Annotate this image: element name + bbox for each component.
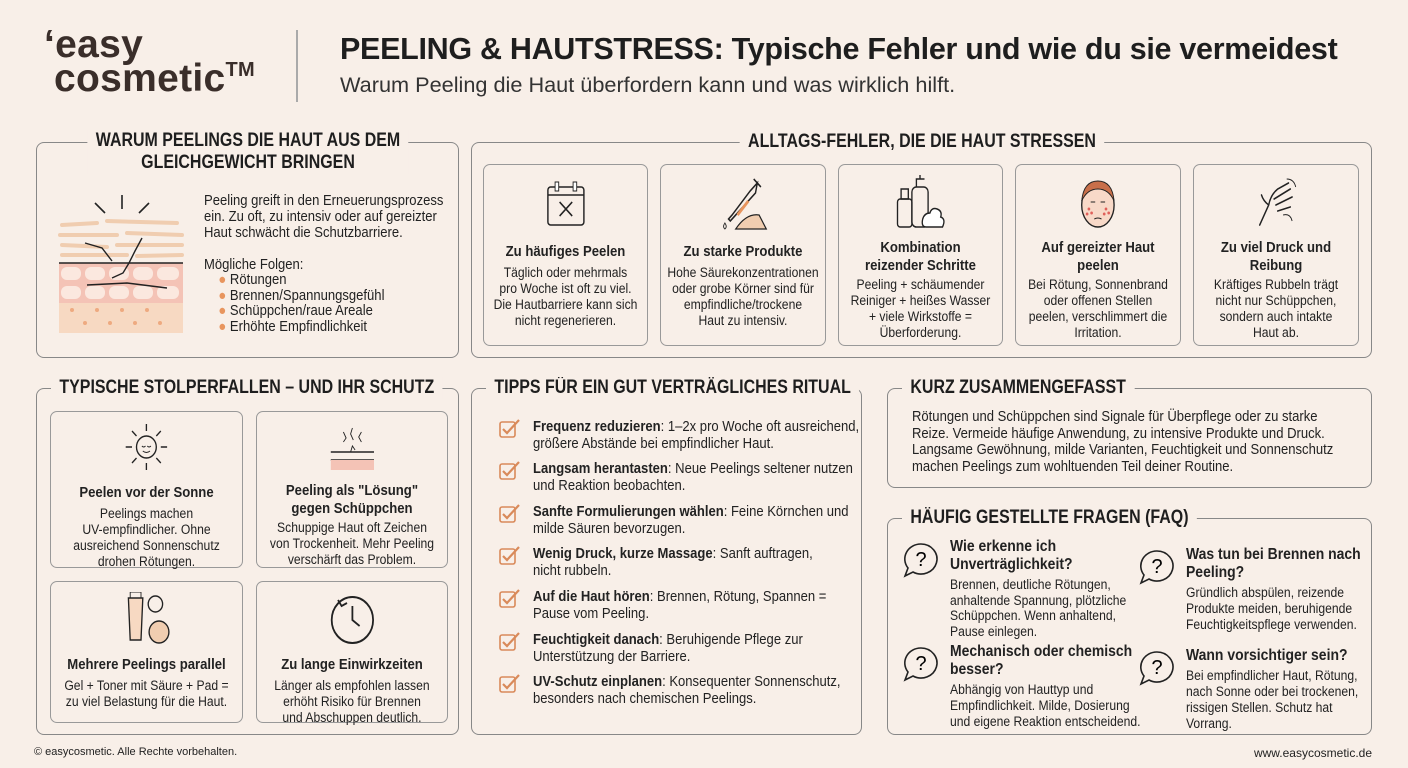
panel: pitfalls: [36, 388, 459, 735]
panel: FAQ: ?: [915, 549, 927, 571]
card: flakes: Peeling als "Lösung": [286, 483, 418, 499]
heading: GLEICHGEWICHT BRINGEN: [141, 152, 355, 173]
text block: ● Erhöhte Empfindlichkeit: [218, 318, 367, 334]
faq 1: anhaltende Spannung, plötzliche: [950, 592, 1126, 608]
card: strong products: Hohe Säurekonzentrationen: [667, 265, 819, 280]
title: PEELING & HAUTSTRESS: Typische Fehler und wie du sie vermeidest: [340, 32, 1337, 66]
panel: why peeling: [36, 142, 459, 358]
card: strong products: Haut zu intensiv.: [699, 313, 787, 328]
faq 3: Abhängig von Hauttyp und: [950, 682, 1093, 697]
summary text: Langsame Gewöhnung, milde Varianten, Feuchtigkeit und Sonnenschutz: [912, 442, 1333, 458]
tip 5: [533, 589, 826, 622]
tip 7: [533, 674, 841, 707]
card: sun: ausreichend Sonnenschutz: [73, 538, 220, 553]
card: sun: Peelen vor der Sonne: [79, 485, 214, 501]
card: sun: drohen Rötungen.: [98, 554, 195, 569]
tip 1: Frequenz reduzieren: 1–2x pro Woche oft ausreichend,: [533, 419, 859, 435]
card: irritated skin: [1015, 164, 1181, 346]
card: combination: Reiniger + heißes Wasser: [851, 293, 990, 308]
faq 1: Wie erkenne ich: [950, 538, 1056, 555]
card: flakes: Schuppige Haut oft Zeichen: [277, 520, 427, 535]
faq 2: Produkte meiden, beruhigende: [1186, 601, 1352, 616]
faq 3: besser?: [950, 661, 1004, 678]
tip 5: Pause vom Peeling.: [533, 606, 649, 622]
card: irritated skin: peelen, verschlimmert die: [1029, 309, 1167, 324]
heading: WARUM PEELINGS DIE HAUT AUS DEM: [96, 130, 400, 151]
card: sun: [50, 411, 243, 568]
faq 4: [1186, 647, 1358, 731]
card: too often: Die Hautbarriere kann sich: [494, 297, 637, 312]
faq 2: Feuchtigkeitspflege verwenden.: [1186, 617, 1357, 632]
faq 4: Vorrang.: [1186, 716, 1232, 731]
text block: ● Rötungen: [218, 272, 287, 288]
panel: FAQ: [887, 518, 1372, 735]
card: pressure: sondern auch intakte: [1220, 309, 1332, 324]
tip 7: besonders nach chemischen Peelings.: [533, 691, 756, 707]
tip 4: nicht rubbeln.: [533, 563, 611, 579]
tip 2: und Reaktion beobachten.: [533, 478, 685, 494]
tip 6: [533, 632, 803, 665]
card: too often: Täglich oder mehrmals: [504, 265, 627, 280]
subtitle: Warum Peeling die Haut überfordern kann und was wirklich hilft.: [340, 72, 955, 97]
card: irritated skin: peelen: [1077, 258, 1119, 274]
tip 3: milde Säuren bevorzugen.: [533, 521, 685, 537]
card: irritated skin: Auf gereizter Haut: [1041, 240, 1155, 256]
faq 3: Mechanisch oder chemisch: [950, 643, 1132, 660]
card: exposure time: und Abschuppen deutlich.: [282, 710, 422, 725]
heading: KURZ ZUSAMMENGEFASST: [910, 377, 1126, 398]
tip 3: [533, 504, 848, 537]
card: multiple peelings: Gel + Toner mit Säure + Pad =: [64, 678, 229, 693]
tip 5: Auf die Haut hören: Brennen, Rötung, Spannen =: [533, 589, 826, 605]
card: pressure: Kräftiges Rubbeln trägt: [1214, 277, 1338, 292]
text block: ein. Zu oft, zu intensiv oder auf gereizter: [204, 209, 437, 225]
tip 4: [533, 546, 813, 579]
summary text: [912, 408, 1333, 474]
summary text: Rötungen und Schüppchen sind Signale für Überpflege oder zu starke: [912, 409, 1318, 425]
text block: ● Brennen/Spannungsgefühl: [218, 288, 384, 304]
faq 2: [1186, 546, 1361, 632]
card: sun: UV-empfindlicher. Ohne: [82, 522, 211, 537]
faq 4: nach Sonne oder bei trockenen,: [1186, 684, 1358, 699]
panel: FAQ: ?: [915, 653, 927, 675]
tip 3: Sanfte Formulierungen wählen: Feine Körnchen und: [533, 504, 848, 520]
tip 4: Wenig Druck, kurze Massage: Sanft auftragen,: [533, 546, 813, 562]
card: flakes: verschärft das Problem.: [288, 552, 416, 567]
panel: tips: [471, 388, 862, 735]
card: irritated skin: oder offenen Stellen: [1044, 293, 1152, 308]
card: multiple peelings: zu viel Belastung für die Haut.: [66, 694, 227, 709]
faq 2: Was tun bei Brennen nach: [1186, 546, 1361, 563]
faq 4: Bei empfindlicher Haut, Rötung,: [1186, 668, 1358, 683]
card: exposure time: erhöht Risiko für Brennen: [283, 694, 421, 709]
faq 3: [950, 643, 1141, 729]
summary text: machen Peelings zum wohltuenden Teil deiner Routine.: [912, 458, 1233, 474]
card: too often: nicht regenerieren.: [515, 313, 616, 328]
card: pressure: Haut ab.: [1253, 325, 1299, 340]
tip 2: Langsam herantasten: Neue Peelings seltener nutzen: [533, 461, 853, 477]
card: strong products: oder grobe Körner sind für: [672, 281, 814, 296]
text block: Peeling greift in den Erneuerungsprozess: [204, 193, 443, 209]
faq 1: Brennen, deutliche Rötungen,: [950, 577, 1111, 592]
card: flakes: von Trockenheit. Mehr Peeling: [270, 536, 434, 551]
card: pressure: Zu viel Druck und: [1221, 240, 1331, 256]
tip 6: Feuchtigkeit danach: Beruhigende Pflege zur: [533, 632, 803, 648]
faq 4: Wann vorsichtiger sein?: [1186, 647, 1347, 664]
card: exposure time: [256, 581, 448, 723]
logo: cosmeticTM: [54, 57, 255, 100]
heading: TYPISCHE STOLPERFALLEN – UND IHR SCHUTZ: [59, 377, 434, 398]
heading: ALLTAGS-FEHLER, DIE DIE HAUT STRESSEN: [748, 131, 1096, 152]
card: combination: reizender Schritte: [865, 258, 976, 274]
panel: everyday mistakes: [471, 142, 1372, 358]
card: pressure: nicht nur Schüppchen,: [1216, 293, 1336, 308]
faq icons: [904, 543, 1174, 686]
card: strong products: empfindliche/trockene: [684, 297, 802, 312]
card: exposure time: Zu lange Einwirkzeiten: [281, 657, 423, 673]
faq 3: Empfindlichkeit. Milde, Dosierung: [950, 698, 1130, 713]
card: flakes: [256, 411, 448, 568]
card: combination: Überforderung.: [880, 325, 961, 340]
footer left: © easycosmetic. Alle Rechte vorbehalten.: [34, 746, 237, 758]
tip list: [499, 419, 859, 707]
card: too often: pro Woche ist oft zu viel.: [499, 281, 632, 296]
icon: skin layers: [58, 195, 184, 333]
card: flakes: gegen Schüppchen: [291, 501, 413, 517]
card: multiple peelings: Mehrere Peelings parallel: [67, 657, 226, 673]
tip 2: [533, 461, 853, 494]
faq 1: Unverträglichkeit?: [950, 556, 1072, 573]
panel: FAQ: ?: [1151, 657, 1163, 679]
faq 2: Gründlich abspülen, reizende: [1186, 585, 1344, 600]
panel: FAQ: ?: [1151, 556, 1163, 578]
card: too often: Zu häufiges Peelen: [506, 244, 625, 260]
tip 6: Unterstützung der Barriere.: [533, 649, 690, 665]
tip 7: UV-Schutz einplanen: Konsequenter Sonnenschutz,: [533, 674, 841, 690]
card: pressure: Reibung: [1250, 258, 1302, 274]
card: sun: Peelings machen: [100, 506, 193, 521]
card: pressure: [1193, 164, 1359, 346]
faq 3: und eigene Reaktion entscheidend.: [950, 714, 1141, 729]
logo: ‘easy: [44, 23, 143, 66]
text block: ● Schüppchen/raue Areale: [218, 303, 373, 319]
text block: Mögliche Folgen:: [204, 257, 303, 273]
card: too often: [483, 164, 648, 346]
card: combination: Kombination: [880, 240, 961, 256]
card: strong products: Zu starke Produkte: [684, 244, 802, 260]
logo: [44, 23, 255, 100]
card: strong products: [660, 164, 826, 346]
heading: TIPPS FÜR EIN GUT VERTRÄGLICHES RITUAL: [494, 377, 851, 398]
faq 2: Peeling?: [1186, 564, 1244, 581]
heading: [87, 130, 409, 174]
card: combination: Peeling + schäumender: [856, 277, 984, 292]
card: combination: [838, 164, 1003, 346]
card: exposure time: Länger als empfohlen lassen: [274, 678, 430, 693]
faq 1: [950, 538, 1126, 639]
text block: Haut schwächt die Schutzbarriere.: [204, 225, 403, 241]
checkboxes: [499, 419, 520, 693]
card: multiple peelings: [50, 581, 243, 723]
card: irritated skin: Irritation.: [1074, 325, 1122, 340]
summary text: Reize. Vermeide häufige Anwendung, zu intensive Produkte und Druck.: [912, 426, 1325, 442]
tip 1: größere Abstände bei empfindlicher Haut.: [533, 436, 774, 452]
faq 1: Pause einlegen.: [950, 624, 1037, 638]
card: irritated skin: Bei Rötung, Sonnenbrand: [1028, 277, 1168, 292]
faq 4: rissigen Stellen. Schutz hat: [1186, 700, 1333, 715]
card: combination: + viele Wirkstoffe =: [869, 309, 972, 324]
faq 1: Schüppchen. Wenn anhaltend,: [950, 608, 1116, 623]
text block: [204, 193, 443, 334]
footer right: www.easycosmetic.de: [1254, 746, 1372, 760]
tip 1: [533, 419, 859, 452]
panel: summary: [887, 388, 1372, 488]
heading: HÄUFIG GESTELLTE FRAGEN (FAQ): [910, 507, 1189, 528]
